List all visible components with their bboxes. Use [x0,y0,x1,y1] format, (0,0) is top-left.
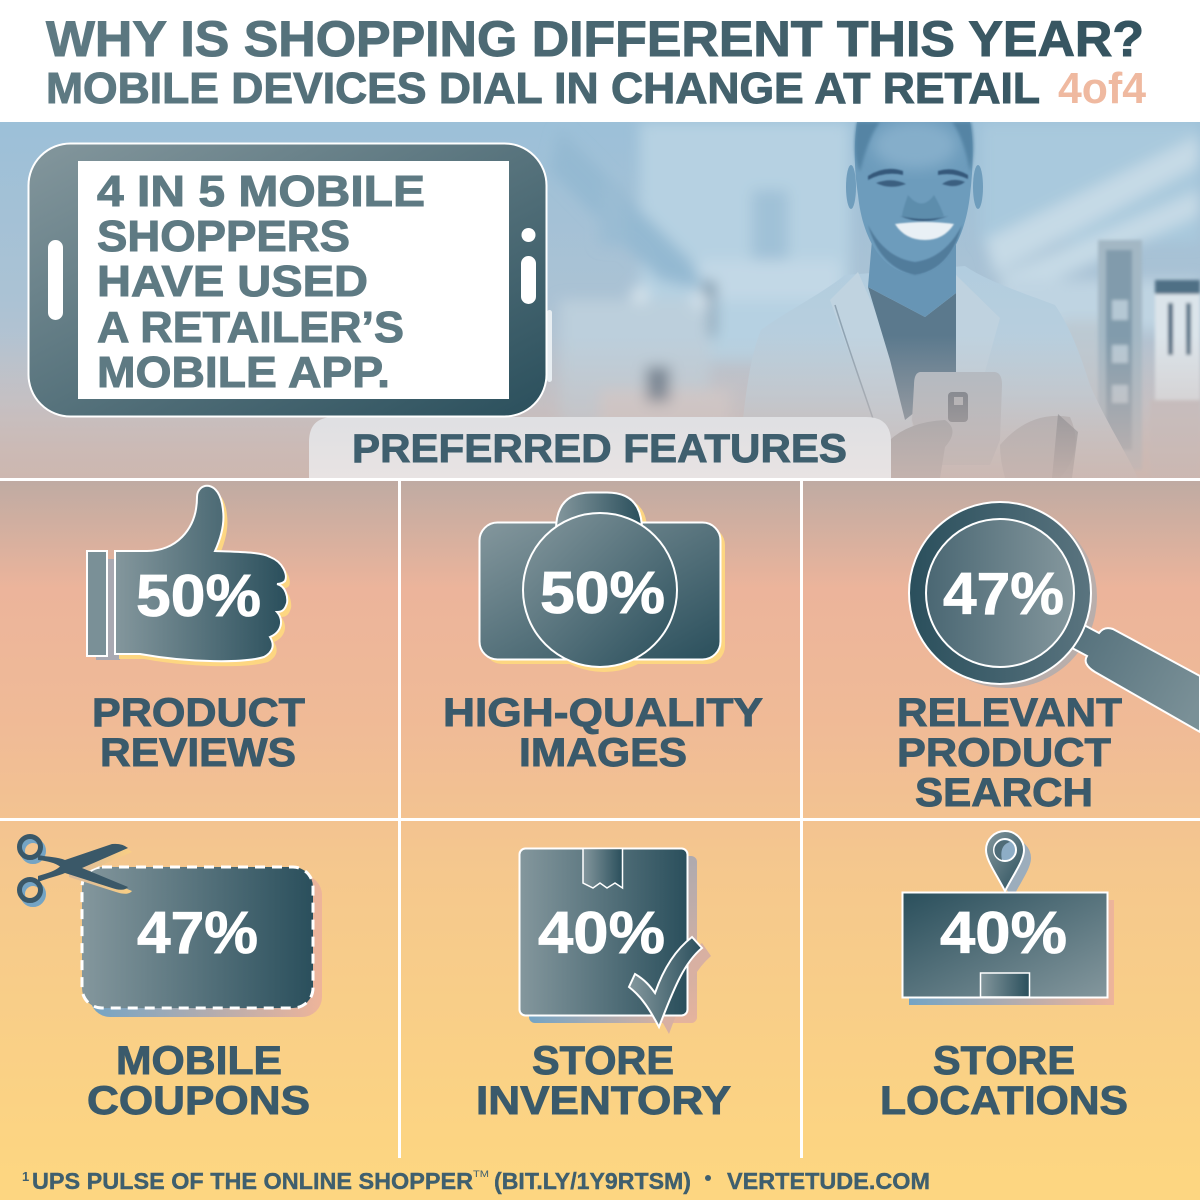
title: 4of4 [1058,64,1147,113]
icon: box with tape [520,848,711,1034]
stat: 40 percent: 40% [940,900,1067,966]
jacket [745,266,1128,460]
panel: store locations [880,831,1128,1123]
icon: coupon [82,867,322,1017]
panel: relevant product search [897,502,1200,815]
label: high-quality images: IMAGES [519,731,687,775]
stat: 47 percent: 47% [137,900,258,966]
stat: 40 percent: 40% [538,900,665,966]
phone graphic with statistic: HAVE USED [97,257,368,306]
label: mobile coupons [87,1039,310,1123]
icon: thumbs up [87,486,291,666]
icon: storefront and location pin [902,831,1114,1005]
title [46,11,1147,113]
features grid background [0,481,1200,1200]
title: WHY IS SHOPPING DIFFERENT THIS YEAR? [46,11,1144,67]
label: product reviews: REVIEWS [100,731,296,775]
phone graphic with statistic: SHOPPERS [97,212,350,261]
forehead highlight [873,121,957,169]
tab: preferred features [309,417,891,478]
title: MOBILE DEVICES DIAL IN CHANGE AT RETAIL [46,64,1040,113]
tab: preferred features: PREFERRED FEATURES [352,427,847,471]
label: store inventory: STORE [532,1039,674,1083]
panel: mobile coupons [20,836,322,1123]
phone graphic with statistic: 4 IN 5 MOBILE [97,167,425,216]
label: store inventory: INVENTORY [476,1079,731,1123]
label: product reviews: PRODUCT [92,691,305,735]
panel: product reviews [87,486,305,775]
label: store locations: STORE [933,1039,1075,1083]
icon: camera [480,492,725,672]
label: relevant product search [897,691,1122,815]
label: mobile coupons: MOBILE [116,1039,282,1083]
label: high-quality images: HIGH-QUALITY [443,691,763,735]
stat: 50 percent: 50% [540,560,665,626]
footer source line: (BIT.LY/1Y9RTSM) [494,1168,691,1194]
label: mobile coupons: COUPONS [87,1079,310,1123]
lapel shading [830,272,884,340]
label: high-quality images [443,691,763,775]
icon: check mark [629,937,702,1027]
footer source line: UPS PULSE OF THE ONLINE SHOPPER [32,1168,473,1194]
hero photo: smiling man using a phone [0,121,1200,480]
label: relevant product search: PRODUCT [897,731,1111,775]
warm bottom wash [0,348,1200,478]
label: relevant product search: SEARCH [915,771,1093,815]
phone graphic with statistic: A RETAILER’S [97,303,404,352]
phone in hand [912,372,1002,430]
label: store inventory [476,1039,731,1123]
footer source line [22,1168,930,1194]
ears [846,165,856,209]
stat: 50 percent: 50% [136,563,261,629]
label: relevant product search: RELEVANT [897,691,1122,735]
panel: store inventory [476,848,731,1123]
label: store locations [880,1039,1128,1123]
label: product reviews [92,691,305,775]
footer source line: VERTETUDE.COM [727,1168,930,1194]
footer source line: TM [473,1169,489,1179]
label: store locations: LOCATIONS [880,1079,1128,1123]
phone graphic with statistic: MOBILE APP. [97,348,390,397]
facial features [868,169,968,275]
stat: 47 percent: 47% [943,561,1064,627]
footer source line: 1 [22,1169,29,1184]
neck [868,240,956,317]
icon: scissors [20,836,132,904]
head [854,122,972,244]
phone graphic with statistic [28,144,552,416]
hands [891,420,952,477]
shirt [868,287,956,420]
panel: high-quality images [443,492,763,775]
icon: magnifying glass [909,502,1200,732]
hair shading [855,122,973,172]
